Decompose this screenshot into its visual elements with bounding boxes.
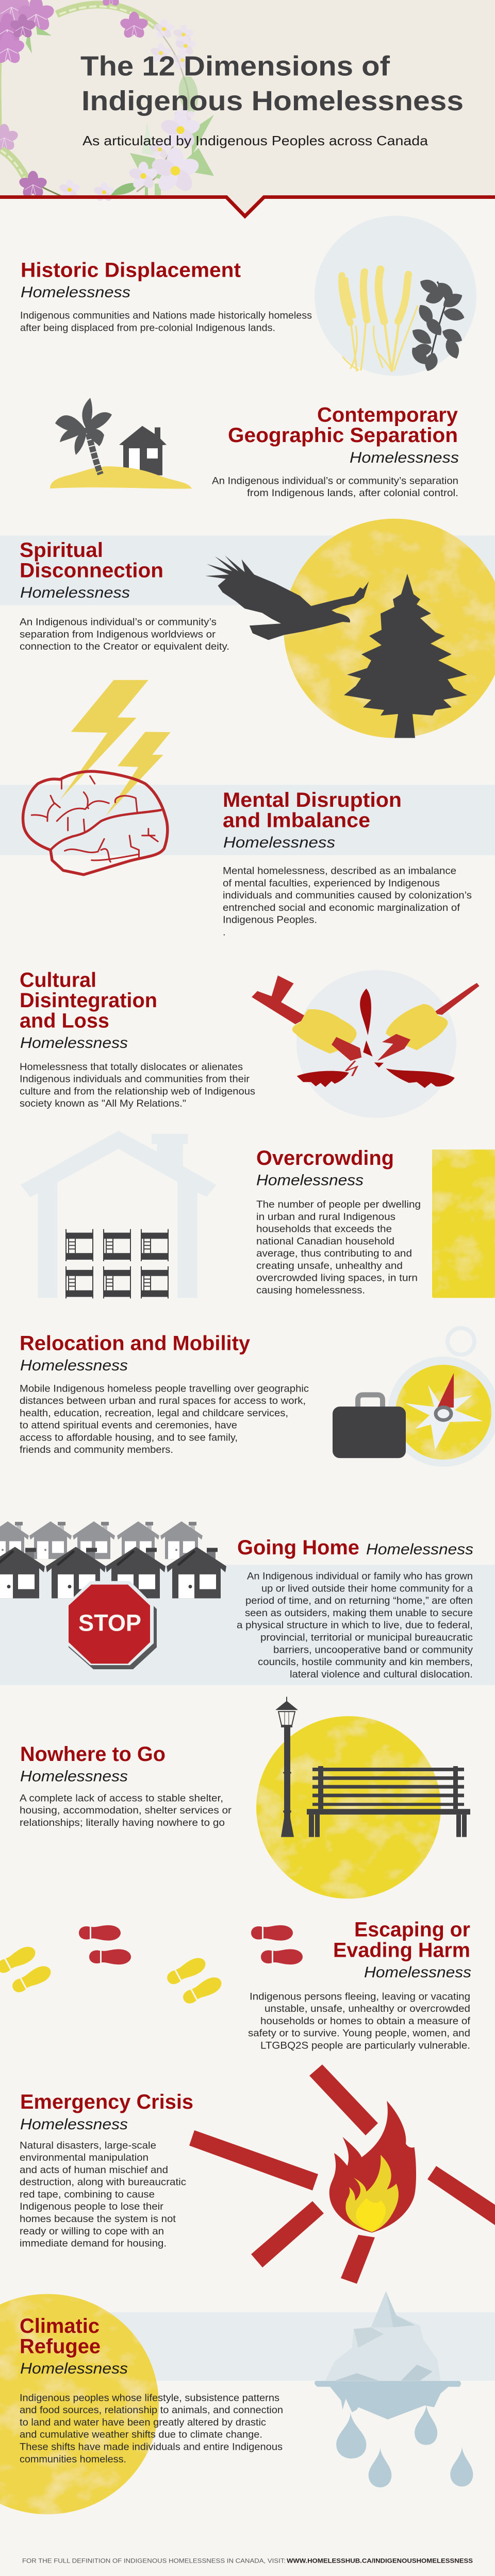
decoration: floral wreath [0,0,214,202]
text block: culture and from the relationship web of Indigenous [20,1086,255,1097]
text block: ready or willing to cope with an [20,2226,164,2237]
subheading: Homelessness [350,449,459,466]
text block: of mental faculties, experienced by Indigenous [223,878,440,889]
text block: entrenched social and economic marginalization of [223,902,460,913]
heading [20,2315,101,2358]
panel: nowhere to go [20,1697,470,1899]
text block: individuals and communities caused by colonization’s [223,890,472,901]
heading: Going Home [237,1536,359,1559]
panel: historic displacement [20,216,476,376]
text block [223,866,472,938]
footer: FOR THE FULL DEFINITION OF INDIGENOUS HOMELESSNESS IN CANADA, VISIT: [22,2557,286,2564]
icon: street lamp [275,1697,298,1837]
panel: header [0,0,495,218]
text block: distances between urban and rural spaces for access to work, [20,1395,306,1406]
text block: period of time, and on returning “home,” are often [245,1595,473,1606]
title [80,51,464,116]
text block: communities homeless. [20,2453,126,2465]
panel: spiritual disconnection [0,519,495,738]
icon: red footprints [79,1925,303,1964]
text block: to land and water have been greatly altered by drastic [20,2417,266,2428]
panel: relocation and mobility [20,1328,495,1467]
icon: yellow circle [0,2294,159,2514]
icon: yellow footprints [0,1943,224,2007]
subheading: Homelessness [20,2116,128,2133]
icon: row of dark houses [0,1547,226,1598]
text block: An Indigenous individual’s or community’s [20,617,217,628]
subheading: Homelessness [366,1541,473,1558]
icon: pine tree [344,574,467,738]
text block: Natural disasters, large-scale [20,2140,156,2151]
text block: LTGBQ2S people are particularly vulnerable. [260,2040,470,2051]
panel: climatic refugee [0,2291,495,2514]
panel: emergency crisis [20,2064,495,2284]
text block: access to affordable housing, and to see family, [20,1432,238,1443]
text block [20,1061,255,1109]
heading: and Imbalance [223,809,370,832]
icon: compass [388,1328,495,1467]
subheading: Homelessness [223,834,335,851]
icon: plants in pale circle [315,216,476,376]
icon: row of grey houses [0,1521,203,1559]
heading: Contemporary [317,404,458,427]
text block [20,1792,232,1828]
footer [22,2557,473,2564]
panel: mental disruption and imbalance [0,680,495,938]
icon: yellow moon [284,519,495,738]
icon: stop sign: STOP [78,1610,141,1636]
text block: environmental manipulation [20,2152,148,2163]
text block: councils, hostile community and kin members, [258,1656,473,1668]
heading: Overcrowding [256,1147,394,1170]
heading: Nowhere to Go [20,1743,166,1766]
text block: relationships; literally having nowhere to go [20,1817,225,1828]
text block [237,1571,473,1680]
text block: Indigenous peoples whose lifestyle, subsistence patterns [20,2393,279,2403]
icon: park bench [307,1766,470,1837]
heading [20,969,157,1032]
heading [223,789,402,832]
icon: stop sign [65,1581,157,1669]
text block: Indigenous persons fleeing, leaving or vacating [250,1991,470,2002]
text block: health, education, recreation, legal and childcare services, [20,1408,288,1419]
text block: An Indigenous individual’s or community’s separation [212,476,458,486]
text block: a physical structure in which to live, due to federal, [237,1620,473,1631]
text block: after being displaced from pre-colonial Indigenous lands. [20,323,275,333]
band [0,2312,495,2381]
subheading: Homelessness [20,2360,128,2377]
heading: Evading Harm [333,1939,470,1961]
title: Indigenous Homelessness [81,86,464,116]
icon: yellow rectangle [432,1149,495,1298]
text block: Mobile Indigenous homeless people travelling over geographic [20,1383,309,1394]
icon: flame [329,2101,416,2232]
text block: Mental homelessness, described as an imbalance [223,866,456,877]
text block [20,310,312,333]
subheading: Homelessness [21,284,130,301]
icon: island with palm tree and house [50,398,192,489]
icon: lightning bolts [60,680,171,816]
text block: A complete lack of access to stable shelter, [20,1792,223,1804]
text block: up or lived outside their home community for a [261,1583,473,1594]
text block: overcrowded living spaces, in turn [256,1273,418,1284]
heading [228,404,458,447]
text block: Indigenous Peoples. [223,914,317,926]
heading: Refugee [20,2335,101,2358]
text block [20,617,229,652]
text block: provincial, territorial or municipal bureaucratic [260,1632,473,1643]
heading: Disintegration [20,989,157,1012]
text block: seen as outsiders, making them unable to secure [245,1607,473,1619]
text block: homes because the system is not [20,2213,176,2225]
text block: creating unsafe, unhealthy and [256,1260,403,1272]
subtitle: As articulated by Indigenous Peoples across Canada [82,134,428,148]
text block: The number of people per dwelling [256,1199,421,1210]
icon: melting iceberg [315,2291,473,2487]
text block: in urban and rural Indigenous [256,1211,395,1223]
text block: Indigenous individuals and communities from their [20,1074,250,1085]
text block: unstable, unsafe, unhealthy or overcrowded [265,2003,470,2014]
heading: Disconnection [20,560,163,582]
icon: house outline [21,1131,216,1298]
heading: Spiritual [20,539,103,562]
text block: average, thus contributing to and [256,1248,412,1259]
icon: eagle [205,555,369,640]
text block: separation from Indigenous worldviews or [20,629,216,640]
title: The 12 Dimensions of [80,51,390,81]
text block: national Canadian household [256,1235,394,1247]
icon: brain [23,771,168,875]
text block: to attend spiritual events and ceremonies, have [20,1420,237,1431]
panel: cultural disintegration and loss [20,969,480,1118]
icon: broken pipes and feathers [252,970,480,1118]
heading: Climatic [20,2315,100,2337]
heading: Cultural [20,969,96,991]
text block: An Indigenous individual or family who has grown [247,1571,473,1582]
subheading: Homelessness [364,1964,471,1981]
text block: friends and community members. [20,1444,173,1455]
text block: destruction, along with bureaucratic [20,2177,186,2188]
panel: escaping or evading harm [0,1919,471,2051]
text block: and cumulative weather shifts due to climate change. [20,2429,262,2441]
text block [20,1383,309,1455]
band [0,785,495,855]
text block: . [223,927,226,938]
text block: and acts of human mischief and [20,2164,168,2176]
heading [333,1919,470,1961]
text block: from Indigenous lands, after colonial control. [247,487,458,499]
heading: Mental Disruption [223,789,402,811]
text block: Indigenous people to lose their [20,2201,163,2212]
band [0,535,495,605]
heading: Emergency Crisis [20,2091,193,2113]
subheading: Homelessness [20,1768,128,1785]
heading: Relocation and Mobility [20,1332,250,1354]
text block: Homelessness that totally dislocates or alienates [20,1061,243,1073]
icon: bunk beds [65,1229,169,1298]
text block: immediate demand for housing. [20,2238,167,2249]
text block: housing, accommodation, shelter services or [20,1805,232,1816]
text block: Indigenous communities and Nations made historically homeless [20,310,312,321]
text block: safety or to survive. Young people, women, and [248,2028,470,2039]
subheading: Homelessness [256,1172,364,1189]
text block [212,476,458,499]
text block [20,2140,186,2249]
text block: connection to the Creator or equivalent deity. [20,641,229,652]
heading: and Loss [20,1010,109,1032]
icon: yellow circle [256,1716,441,1899]
icon: radiating red bars [189,2064,495,2284]
text block [248,1991,470,2051]
footer: WWW.HOMELESSHUB.CA/INDIGENOUSHOMELESSNESS [287,2557,473,2564]
text block: causing homelessness. [256,1284,365,1296]
band [0,1565,495,1685]
text block [20,2393,283,2465]
icon: suitcase [333,1395,406,1458]
text block [256,1199,421,1296]
text block: barriers, uncooperative band or community [273,1644,473,1655]
panel: going home [0,1521,495,1685]
subheading: Homelessness [20,1035,128,1052]
subheading: Homelessness [20,1357,128,1374]
heading [20,539,163,582]
text block: lateral violence and cultural dislocation. [290,1669,473,1680]
text block: red tape, combining to cause [20,2189,155,2200]
text block: These shifts have made individuals and entire Indigenous [20,2442,283,2452]
panel: overcrowding [21,1131,495,1298]
heading: Historic Displacement [21,259,241,281]
text block: society known as "All My Relations." [20,1098,186,1109]
heading: Escaping or [354,1919,470,1941]
panel: contemporary geographic separation [50,398,459,499]
text block: and food sources, relationship to animals, and connection [20,2404,283,2416]
heading: Geographic Separation [228,424,458,447]
text block: households or homes to obtain a measure of [260,2015,470,2027]
text block: households that exceeds the [256,1224,392,1235]
subheading: Homelessness [20,584,130,601]
